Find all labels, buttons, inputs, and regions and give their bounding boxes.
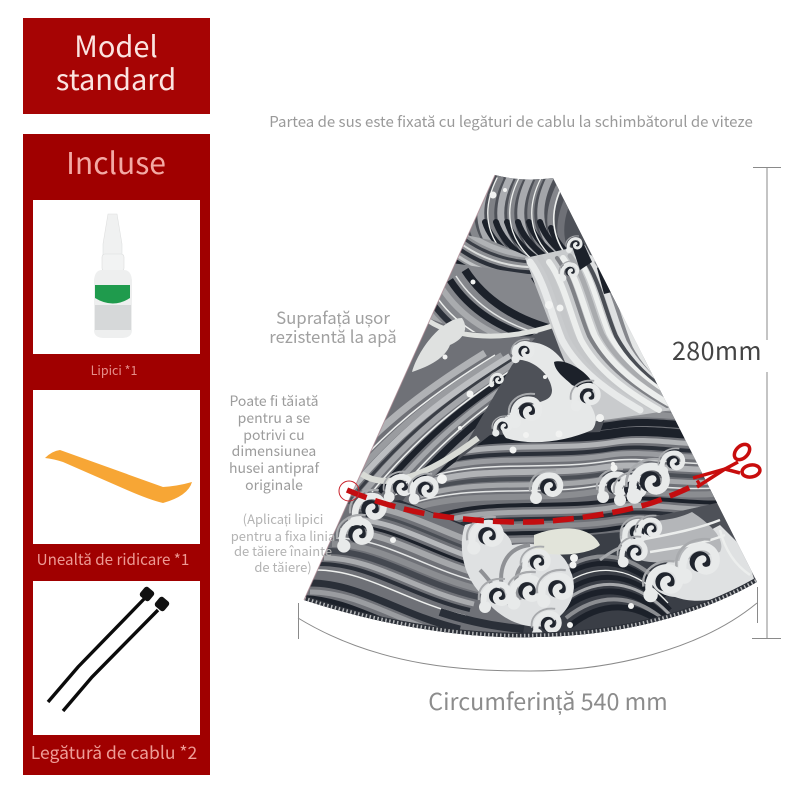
text: height 280mm: 280mm: [672, 332, 762, 368]
upper-right foam strands: [526, 254, 668, 414]
foam spray dots: [390, 188, 634, 628]
foam scroll curls: [337, 236, 716, 639]
label: unealta de ridicare: Unealtă de ridicare *1: [37, 548, 189, 570]
middle horizontal bands: [402, 406, 718, 545]
crest edge of lower-left band: [362, 438, 478, 481]
pale foam detail: [534, 528, 600, 555]
heading: incluse: Incluse: [66, 139, 166, 183]
lower-right wave bands: [522, 532, 709, 638]
top wave stripes: [468, 176, 568, 257]
foam swirl shading: [480, 545, 545, 605]
text: water resistant note: Suprafață ușor: [276, 305, 390, 329]
text: cutting note: husei antipraf: [229, 458, 319, 478]
panel: included items: [23, 134, 210, 775]
lower foam mass: [462, 523, 574, 627]
label: legatura de cablu: Legătură de cablu *2: [31, 740, 197, 765]
horizontal sweep stripes: [455, 236, 531, 274]
image: wave-pattern cone: [290, 170, 770, 650]
text: glue note: de tăiere înainte: [234, 541, 332, 560]
text: water resistant note: [269, 305, 397, 348]
text: cutting note: [229, 391, 319, 495]
crest edge of middle band: [425, 318, 555, 336]
cone left edge tint: [304, 175, 495, 600]
upper foam base: [525, 245, 672, 422]
card: cable ties: [33, 581, 200, 735]
diagonal band: [430, 264, 550, 336]
card: glue: [33, 200, 200, 354]
text: glue note: de tăiere): [254, 557, 312, 576]
dark pocket with ring: [531, 277, 535, 284]
text: cutting note: dimensiunea: [232, 441, 316, 461]
text: circumference: Circumferință 540 mm: [428, 683, 668, 717]
text: cutting note: potrivi cu: [243, 425, 305, 445]
icon: glue bottle: [94, 214, 132, 338]
left foam: [412, 318, 465, 372]
dark pocket in foam: [554, 361, 595, 391]
cut start marker: [339, 481, 359, 501]
foam lines across right: [640, 520, 750, 575]
heading: model standard: Model: [74, 24, 158, 66]
label: lipici: Lipici *1: [91, 360, 137, 379]
text: water resistant note: rezistentă la apă: [269, 324, 397, 348]
icon: orange pry tool: [45, 450, 192, 503]
foam band across right: [620, 512, 721, 562]
foam below upper strands: [501, 342, 596, 442]
text: cutting note: Poate fi tăiată: [229, 391, 319, 411]
stitched hem: [304, 581, 757, 636]
card: pry tool: [33, 390, 200, 544]
lower-left diagonal band: [350, 319, 535, 498]
panel: model standard: standard: [56, 57, 176, 99]
text: cutting note: originale: [245, 475, 303, 495]
text: glue note: pentru a fixa linia: [231, 526, 335, 545]
right foam mass: [651, 525, 755, 601]
icon: scissors: [693, 441, 761, 487]
panel: model standard: [23, 18, 210, 114]
text: glue note: [231, 509, 335, 576]
lower-left wave bands: [304, 500, 531, 638]
text: glue note: (Aplicați lipici: [243, 509, 323, 528]
dark blobs among upper foam: [572, 240, 612, 294]
text: cutting note: pentru a se: [238, 408, 311, 428]
height dimension line: [752, 167, 781, 639]
text: top attachment note: Partea de sus este fixată cu legături de cablu la schimbătorul de viteze: [269, 111, 753, 132]
icon: cable ties: [48, 586, 170, 711]
cut line: [347, 482, 700, 522]
circumference arc: [298, 587, 758, 671]
